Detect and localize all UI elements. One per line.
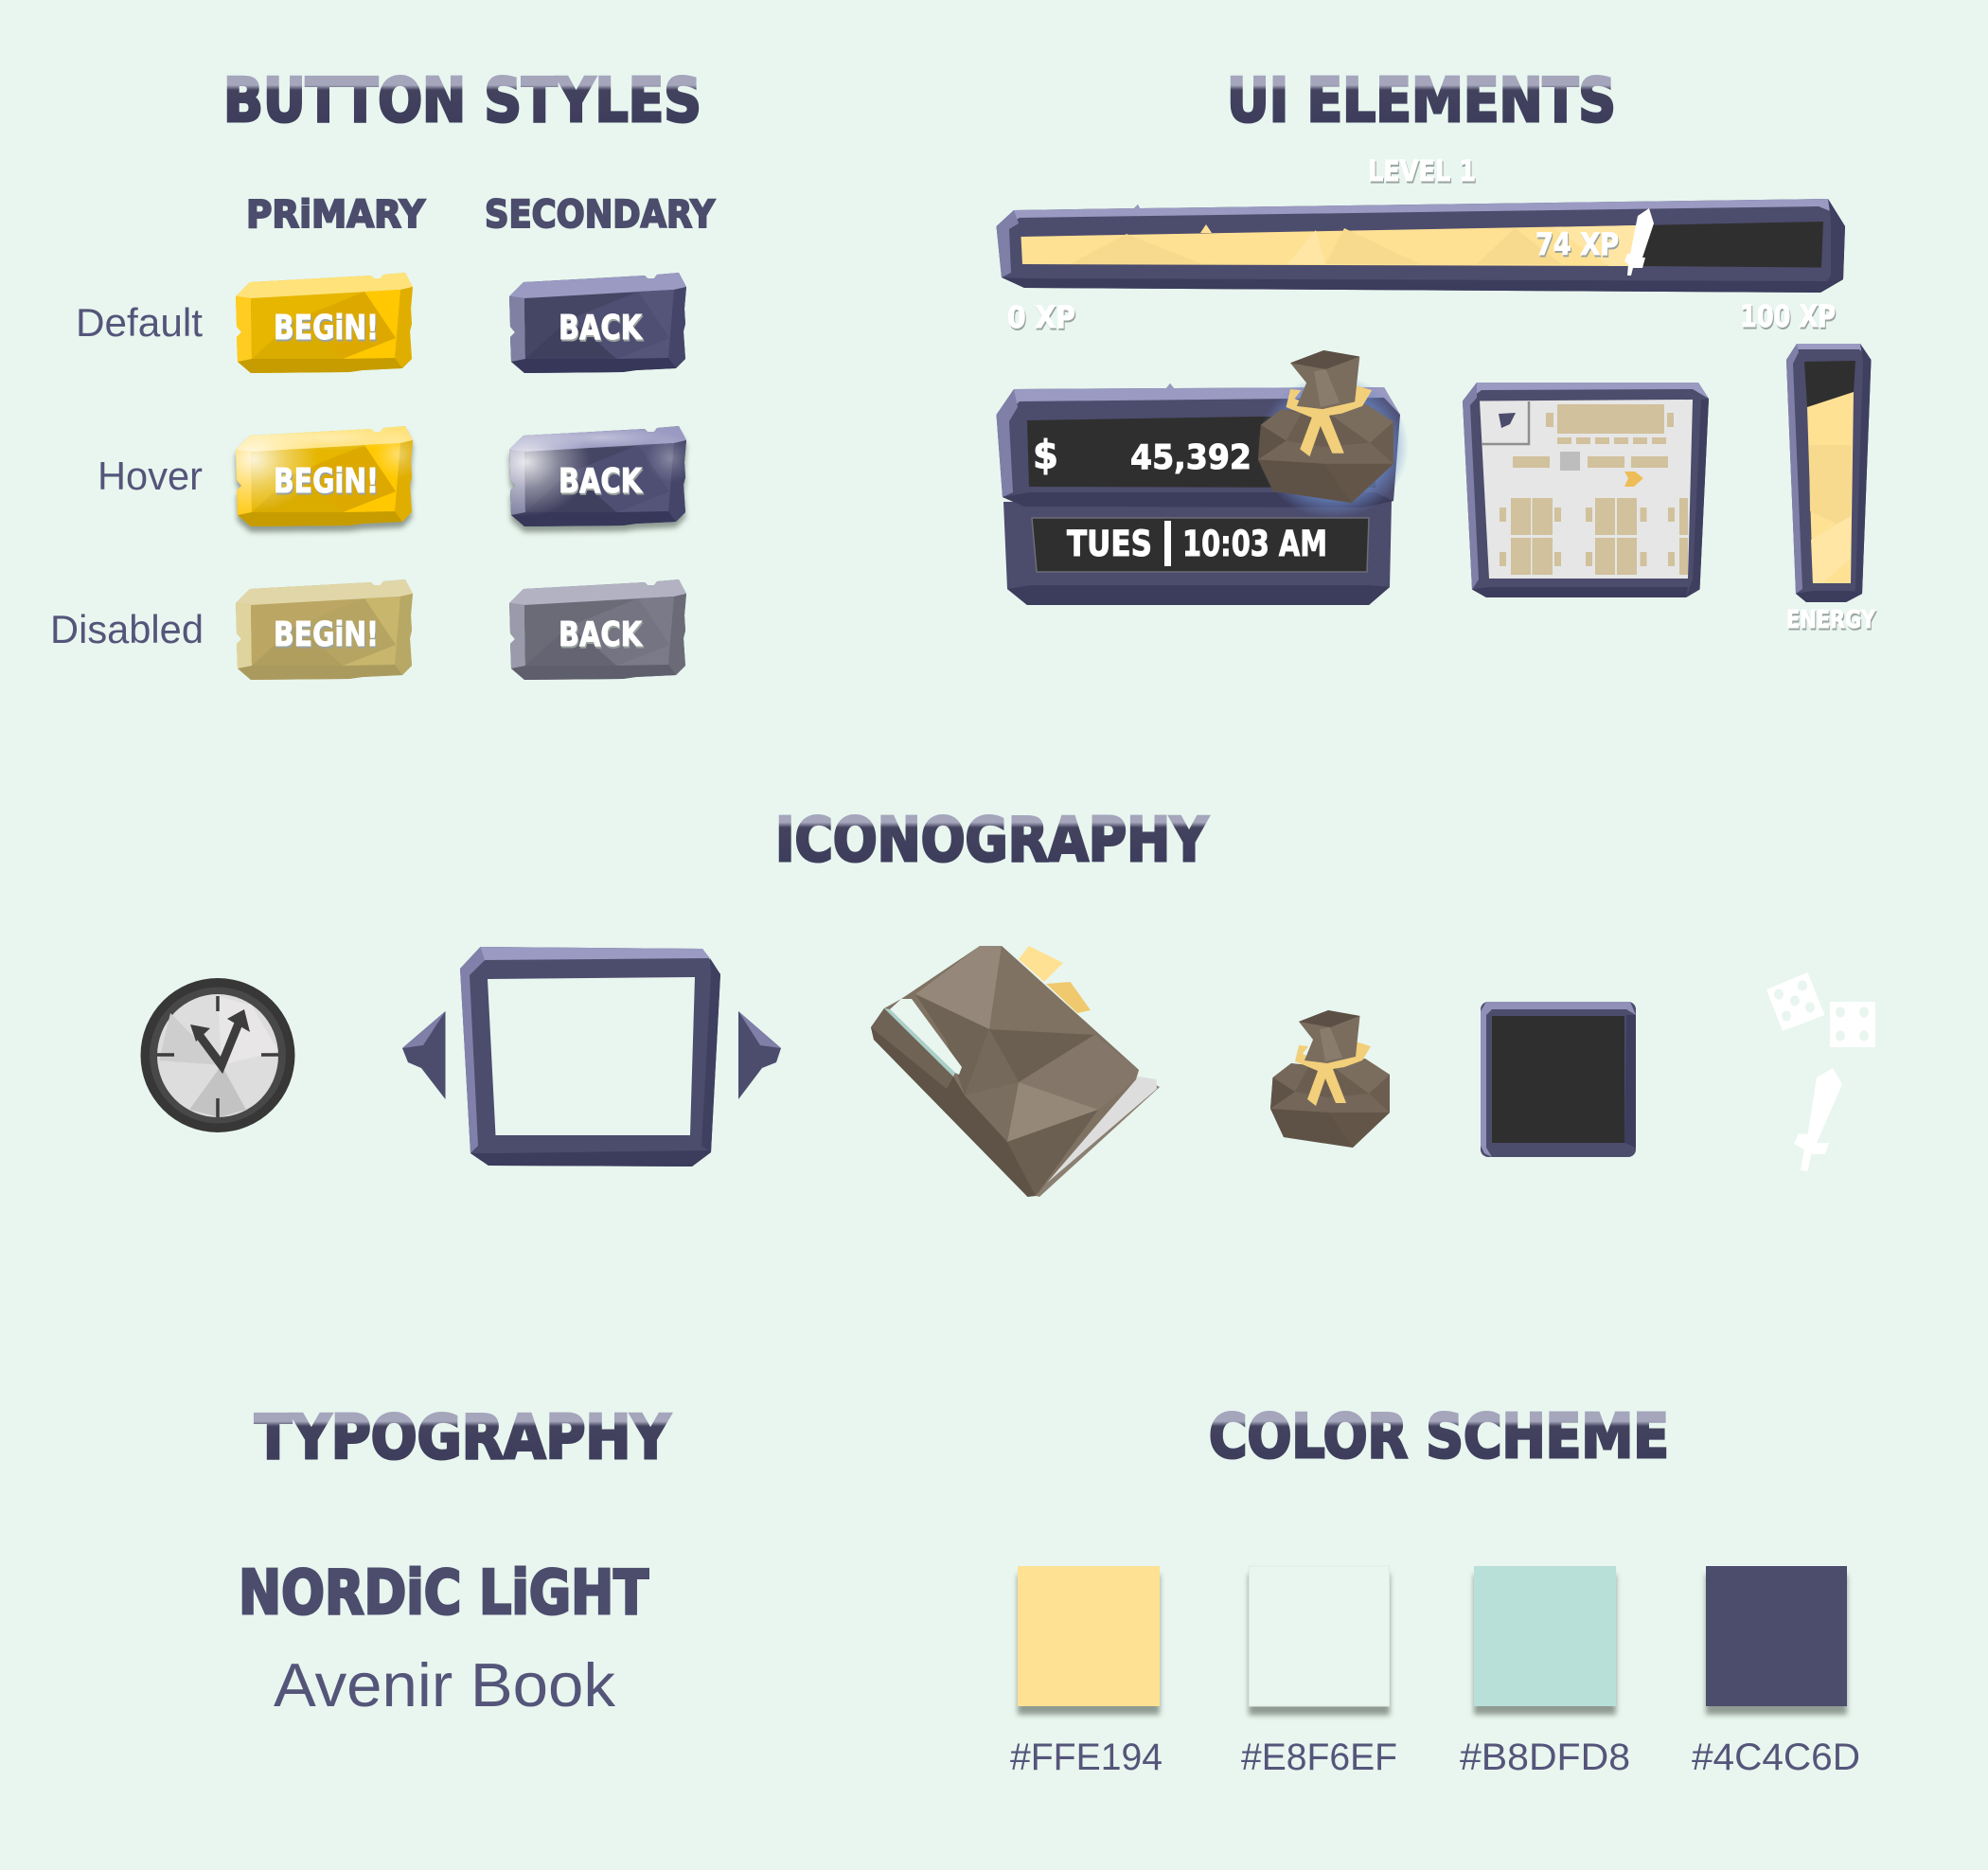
button: primary hover: [232, 426, 417, 536]
row label: hover: Hover: [98, 454, 203, 498]
swatch: teal: [1474, 1566, 1616, 1706]
text: dollar sign: $: [1033, 432, 1058, 478]
panel: date and time: [1003, 500, 1392, 605]
icon: left arrow: [402, 1011, 445, 1099]
minimap player arrow: [1624, 472, 1643, 487]
button: secondary disabled: BACK: [559, 615, 643, 654]
swatch label: yellow: #FFE194: [1010, 1736, 1163, 1778]
label: energy: ENERGY: [1786, 606, 1876, 634]
icon: money bag: [1258, 350, 1393, 503]
heading: ui elements: UI ELEMENTS: [1227, 66, 1616, 136]
button: secondary default: [509, 273, 686, 373]
text: money amount: 45,392: [1130, 438, 1251, 477]
xp progress bar: [996, 199, 1845, 293]
frame top bevel: [460, 947, 710, 979]
column heading: secondary: SECONDARY: [485, 193, 716, 237]
swatch: indigo: [1706, 1566, 1847, 1706]
text: time: 10:03 AM: [1182, 524, 1327, 564]
panel: money: [996, 350, 1409, 519]
text: day: TUES: [1067, 524, 1152, 564]
icon: money bag: [1270, 1010, 1390, 1148]
button: secondary hover: [506, 426, 689, 536]
frame right bevel: [701, 958, 720, 1152]
label: 0 xp: 0 XP: [1007, 299, 1075, 335]
icon: clock: [140, 978, 295, 1132]
button: primary default: [236, 273, 413, 373]
button: secondary disabled: [509, 579, 686, 680]
row label: disabled: Disabled: [50, 607, 204, 651]
energy bar: [1786, 344, 1871, 602]
button: secondary hover: BACK: [559, 462, 643, 501]
glow behind bag: [1257, 375, 1409, 519]
row label: default: Default: [76, 300, 203, 345]
button: primary disabled: [236, 579, 413, 680]
column heading: primary: PRiMARY: [246, 193, 426, 237]
icon: empty frame: [460, 947, 720, 1167]
heading: button styles: BUTTON STYLES: [223, 66, 701, 136]
swatch label: teal: #B8DFD8: [1460, 1736, 1630, 1778]
button: secondary default: BACK: [559, 309, 643, 347]
swatch: yellow: [1018, 1566, 1160, 1706]
button: primary hover: BEGiN!: [274, 462, 379, 501]
button: primary default: BEGiN!: [274, 309, 379, 347]
icon: right arrow: [738, 1011, 781, 1099]
heading: color scheme: COLOR SCHEME: [1209, 1402, 1669, 1472]
label: level 1: LEVEL 1: [1368, 155, 1476, 188]
button: primary disabled: BEGiN!: [274, 615, 379, 654]
swatch label: mint white: #E8F6EF: [1241, 1736, 1397, 1778]
heading: iconography: ICONOGRAPHY: [775, 806, 1209, 876]
divider bar: [1164, 521, 1171, 566]
swatch label: indigo: #4C4C6D: [1692, 1736, 1860, 1778]
icon: dice: [1766, 972, 1875, 1047]
panel: minimap: [1463, 383, 1709, 597]
label: 74 xp: 74 XP: [1535, 226, 1619, 262]
minimap inset icon: [1499, 413, 1516, 428]
minimap inset box: [1482, 401, 1529, 444]
icon: sword: [1794, 1068, 1842, 1171]
heading: typography: TYPOGRAPHY: [255, 1403, 671, 1473]
font sample: nordic light: NORDiC LiGHT: [239, 1558, 648, 1629]
swatch: mint white: [1250, 1566, 1390, 1706]
frame left bevel: [460, 947, 485, 1153]
icon: book: [871, 946, 1160, 1197]
label: 100 xp: 100 XP: [1740, 298, 1836, 334]
icon: dark square panel: [1481, 1002, 1636, 1157]
font sample: avenir book: Avenir Book: [274, 1650, 616, 1719]
icon: sword marker: [1624, 208, 1654, 276]
frame bottom bevel: [470, 1150, 711, 1167]
